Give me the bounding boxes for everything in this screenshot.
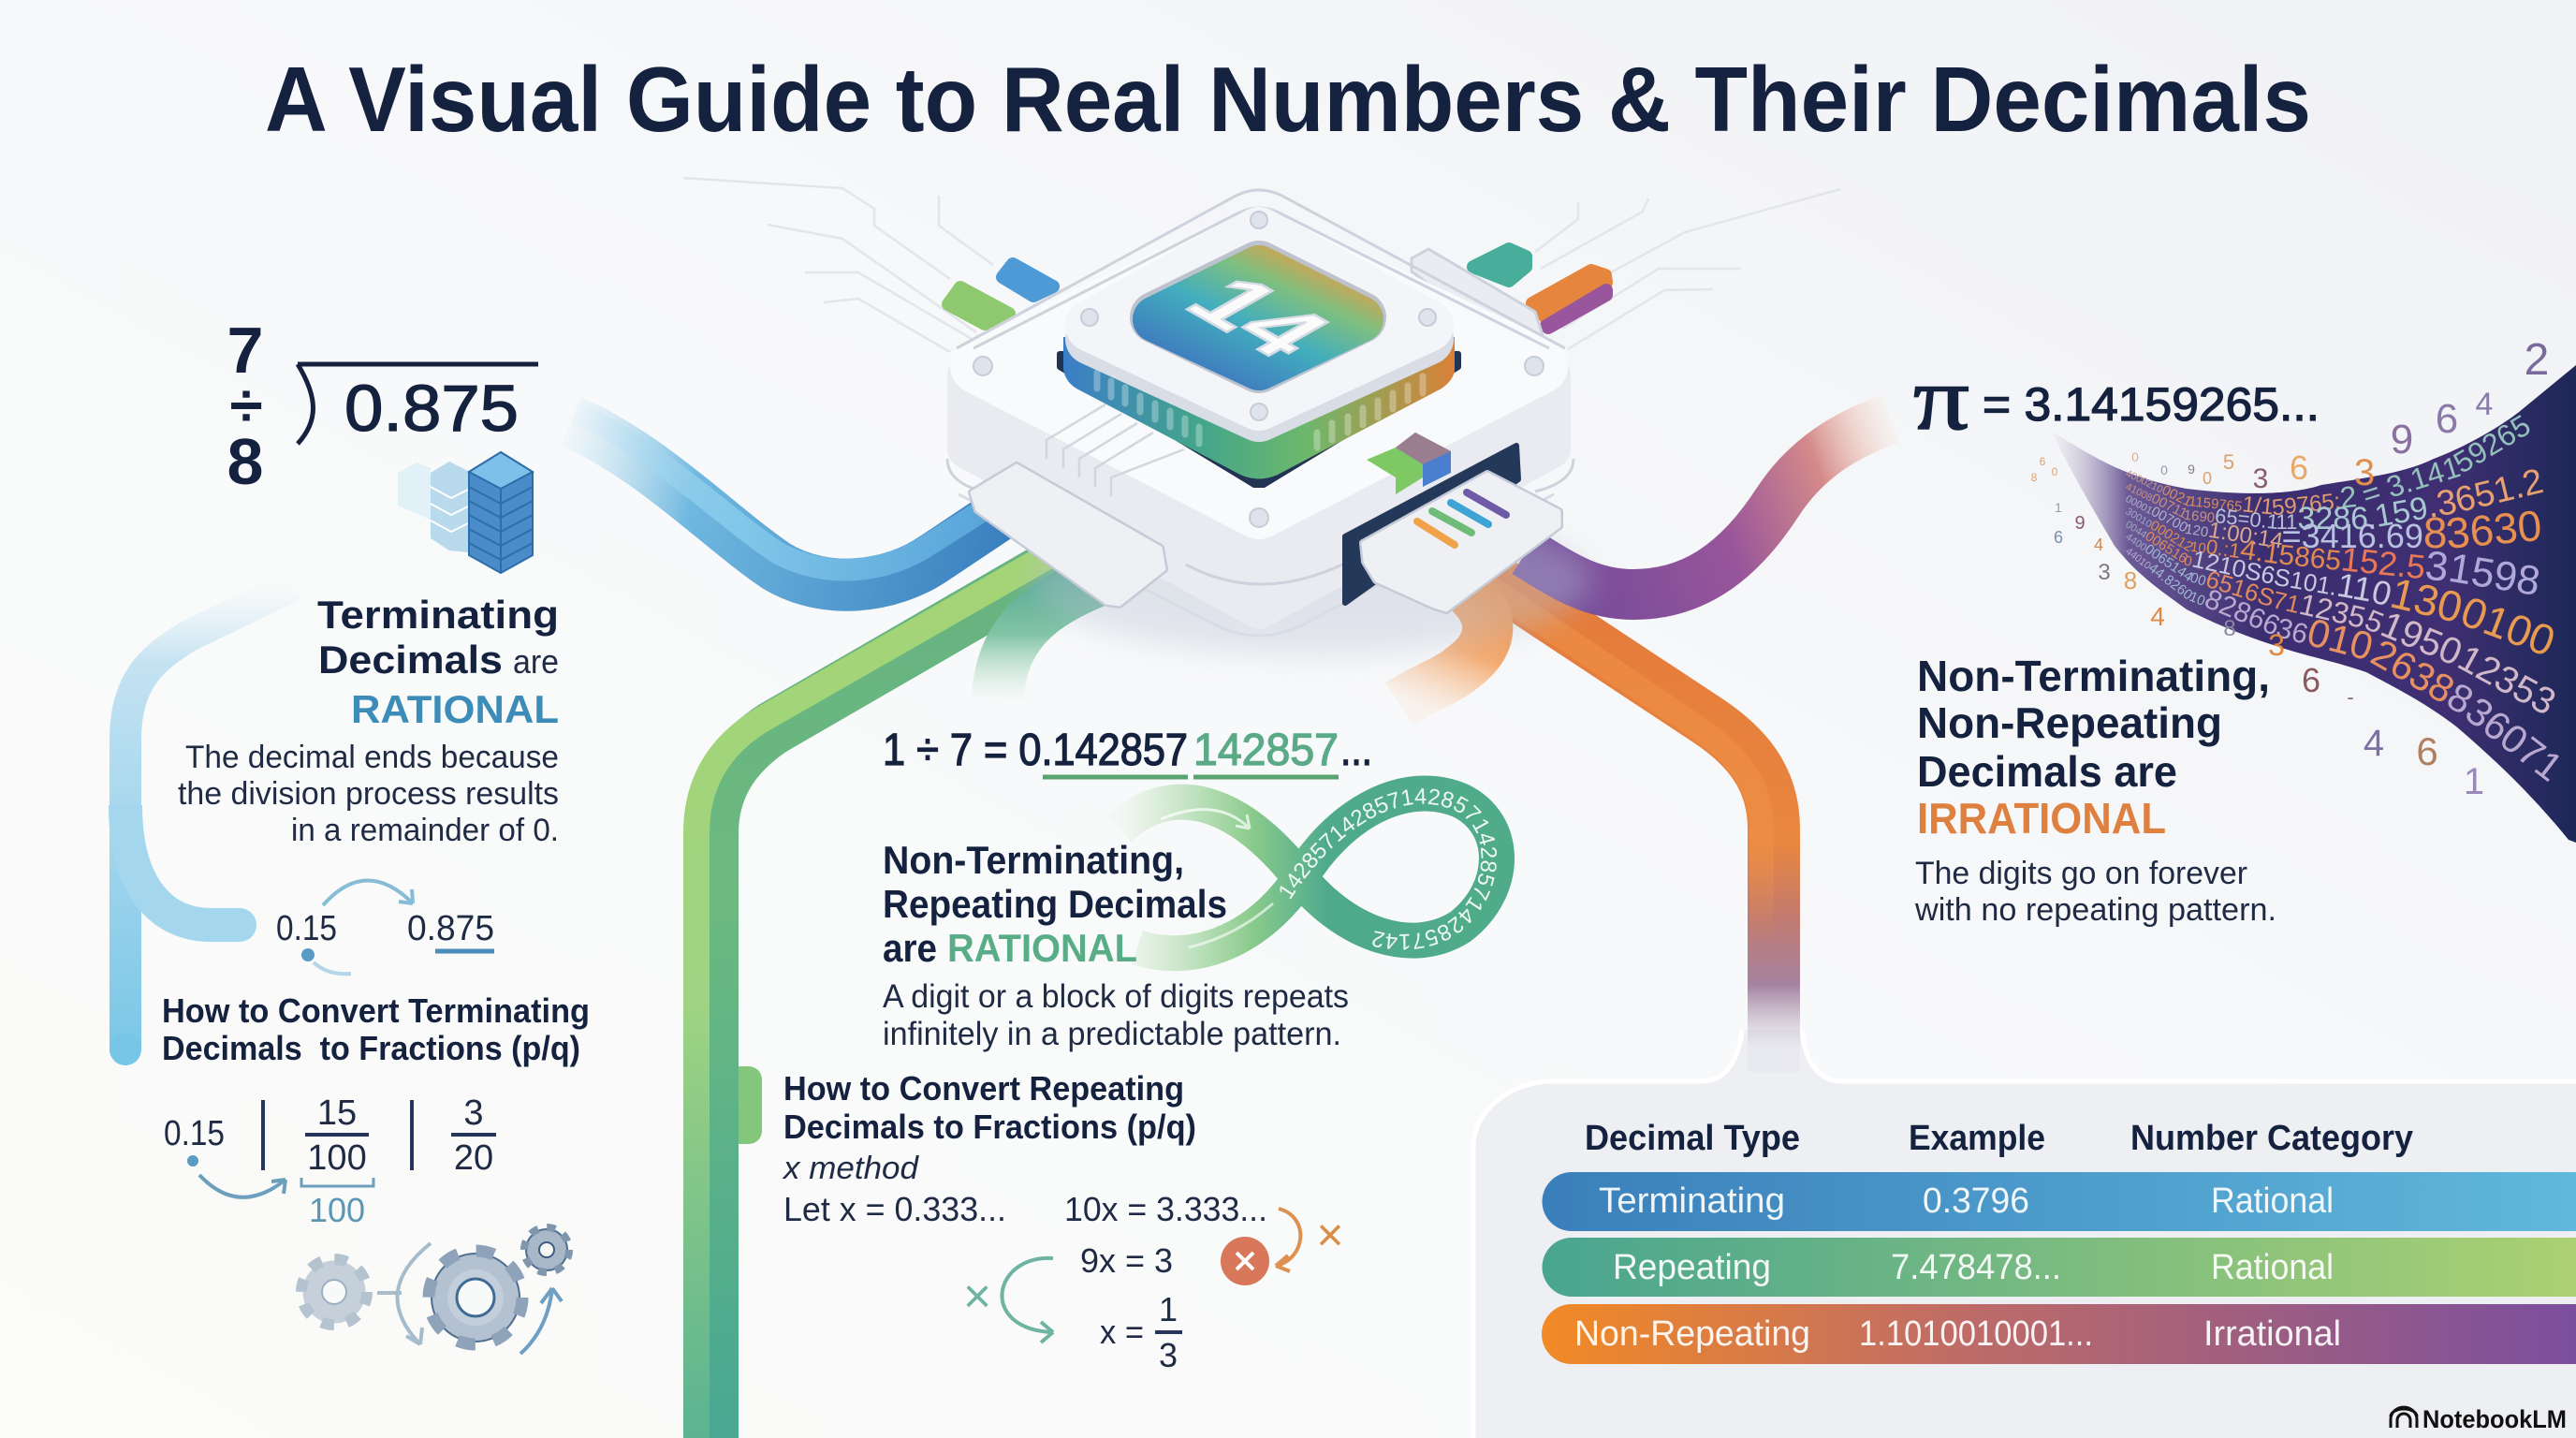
long division <box>227 314 538 498</box>
rear stubs <box>948 249 1606 328</box>
scattered digits: 4 <box>2150 602 2165 631</box>
scattered digits: 9 <box>2074 513 2086 534</box>
scattered digits: 5 <box>2223 450 2234 474</box>
conversion steps: repeating: × <box>963 1269 991 1324</box>
terminating examples: 0.875 <box>407 909 494 948</box>
scattered digits: 4 <box>2476 387 2493 422</box>
heading: convert repeating: How to Convert Repeating <box>783 1069 1184 1108</box>
heading: repeating: Non-Terminating, <box>883 838 1184 882</box>
title: A Visual Guide to Real Numbers & Their Decimals <box>265 48 2311 151</box>
heading: irrational: Non-Repeating <box>1917 698 2222 747</box>
conversion steps: repeating: 1 <box>1159 1290 1178 1328</box>
right connector <box>1363 474 1559 610</box>
long division: 7 <box>227 314 263 387</box>
cable: purple <box>1526 418 1891 594</box>
scattered digits: - <box>2347 685 2354 709</box>
heading: terminating <box>317 593 559 731</box>
scattered digits: 1 <box>2055 500 2062 515</box>
equation: 1 divided by 7: 1 ÷ 7 = 0.142857 <box>883 726 1188 775</box>
chip band <box>1063 337 1455 479</box>
scattered digits: 9 <box>2391 417 2413 462</box>
icon: infinity loop <box>1124 775 1515 972</box>
table row: repeating <box>1543 1238 2576 1297</box>
table header <box>1585 1119 2413 1158</box>
screen bezel <box>1156 267 1360 367</box>
icon: infinity loop: 142857142857142857142857142857142 <box>1281 788 1497 949</box>
left connector <box>972 465 1164 605</box>
scattered digits: 3 <box>2354 452 2375 493</box>
table row: repeating: Rational <box>2211 1248 2334 1287</box>
text: irrational description: with no repeating pattern. <box>1914 892 2276 928</box>
heading: irrational: Non-Terminating, <box>1917 652 2270 700</box>
long division: 0.875 <box>344 372 519 445</box>
heading: repeating: Repeating Decimals <box>883 882 1227 926</box>
scattered digits: 8 <box>2223 616 2236 641</box>
heading: convert terminating: Decimals to Fractions (p/q) <box>162 1029 580 1067</box>
equation: pi <box>1913 348 2320 448</box>
chip plate <box>1091 247 1427 416</box>
text: repeating description <box>883 978 1349 1052</box>
scattered digits: 3 <box>2253 463 2268 494</box>
cable: orange main <box>1451 557 1774 1072</box>
cable: orange secondary <box>1399 576 1487 704</box>
hub outlines <box>947 190 1573 636</box>
conversion steps: repeating: × <box>1316 1209 1344 1261</box>
conversion steps: repeating <box>782 1151 1344 1374</box>
cable: blue <box>571 410 1020 585</box>
decimal ribbon <box>2031 335 2576 843</box>
conversion steps: terminating: 15 <box>317 1093 357 1133</box>
heading: repeating <box>883 838 1227 970</box>
text: terminating description: the division process results <box>178 776 559 812</box>
central hub <box>947 190 1606 655</box>
heading: convert terminating: How to Convert Terminating <box>162 991 590 1030</box>
chip vents <box>1097 373 1423 448</box>
scattered digits: 3 <box>2268 628 2285 662</box>
equation: 1 divided by 7: ... <box>1340 726 1372 775</box>
arrow: teal <box>1002 1258 1053 1343</box>
conversion steps: terminating: 100 <box>309 1191 365 1229</box>
cable: green secondary <box>998 576 1109 697</box>
scattered digits: 8 <box>2031 471 2038 484</box>
ribbon digit rows: 4100800711169065=0.1113286.159.3651.2 <box>2126 470 2543 530</box>
heading: repeating: RATIONAL <box>947 926 1137 970</box>
scattered digits: 6 <box>2040 455 2046 468</box>
table row: non-repeating <box>1542 1304 2576 1364</box>
ribbon digit rows: 30010000212100.:14.15865152.531598 <box>2126 507 2539 594</box>
equation: 1 divided by 7: 142857 <box>1193 726 1339 775</box>
table header: Example <box>1909 1119 2045 1158</box>
screws <box>973 212 1544 527</box>
scattered digits: 8 <box>2124 566 2137 594</box>
equation: pi: π <box>1913 348 1969 448</box>
heading: terminating: are <box>513 642 559 681</box>
long division: ÷ <box>229 372 263 439</box>
scattered digits: 4 <box>2364 723 2384 764</box>
cable: green main <box>696 548 1076 1438</box>
vertical blue connector <box>125 585 294 1049</box>
scattered digits: 2 <box>2525 335 2549 385</box>
icon: red cross <box>1221 1237 1269 1285</box>
table row: repeating: 7.478478... <box>1891 1248 2061 1287</box>
rear right connector <box>1412 249 1543 335</box>
conversion steps: repeating: 9x = 3 <box>1080 1241 1173 1280</box>
heading: irrational <box>1917 652 2270 843</box>
text: repeating description: A digit or a block of digits repeats <box>883 978 1349 1015</box>
ribbon digit rows: 00001007001201:00:14=3416.6983630 <box>2126 495 2540 549</box>
arrow: orange <box>1276 1209 1300 1271</box>
tab on green cable <box>721 1066 762 1144</box>
heading: terminating: RATIONAL <box>351 687 559 731</box>
icon: gears <box>301 1227 569 1354</box>
hub top face <box>978 234 1540 511</box>
table row: terminating: Rational <box>2211 1181 2334 1221</box>
table row: non-repeating: Non-Repeating <box>1574 1314 1810 1354</box>
table row: terminating: 0.3796 <box>1923 1181 2029 1221</box>
text: terminating description: The decimal ends because <box>185 740 559 775</box>
icon: stacked blocks <box>398 452 533 573</box>
heading: terminating: Decimals <box>318 638 503 682</box>
scattered digits: 0 <box>2131 449 2139 464</box>
conversion steps: terminating: 0.15 <box>164 1114 225 1153</box>
colour tag <box>1367 433 1451 494</box>
table row: terminating <box>1543 1172 2576 1231</box>
right connector well <box>1345 446 1518 603</box>
dark well <box>1060 354 1458 485</box>
conversion steps: repeating: Let x = 0.333... <box>783 1190 1006 1228</box>
scattered digits: 6 <box>2054 528 2063 547</box>
table header: Number Category <box>2130 1119 2413 1158</box>
scattered digits: 6 <box>2290 448 2308 487</box>
table row: non-repeating: Irrational <box>2203 1314 2341 1354</box>
scattered digits <box>2031 335 2549 802</box>
scattered digits: 1 <box>2464 761 2484 802</box>
text: irrational description: The digits go on forever <box>1915 856 2247 891</box>
table header: Decimal Type <box>1585 1119 1800 1158</box>
scattered digits: 9 <box>2188 462 2195 477</box>
scattered digits: 0 <box>2160 462 2168 477</box>
heading: repeating: are <box>883 926 937 970</box>
scattered digits: 0 <box>2203 469 2212 488</box>
hub shadow <box>1030 506 1591 655</box>
scattered digits: 4 <box>2094 536 2103 554</box>
table panel <box>1473 1030 2576 1438</box>
heading: irrational: Decimals are <box>1917 747 2177 796</box>
scattered digits: 6 <box>2436 396 2458 442</box>
ribbon digit rows: 4401044.82601082866360102638836071 <box>2126 549 2559 783</box>
text: terminating description: in a remainder of 0. <box>291 813 559 848</box>
ribbon digit rows: 4000210002111597651/159765:2 = 3.14159265 <box>2126 415 2529 515</box>
conversion steps: terminating: 3 <box>463 1093 484 1133</box>
chip number 14: 14 <box>1163 263 1354 371</box>
equation: 1 divided by 7 <box>883 726 1372 777</box>
conversion steps: repeating: x method <box>782 1151 919 1186</box>
ribs <box>1046 404 1184 496</box>
conversion steps: terminating: 100 <box>307 1138 367 1178</box>
conversion steps: repeating: x = <box>1100 1313 1144 1351</box>
heading: irrational: IRRATIONAL <box>1917 794 2166 843</box>
terminating examples: 0.15 <box>276 909 337 948</box>
conversion steps: terminating <box>164 1093 496 1229</box>
chip screen <box>1156 269 1360 367</box>
heading: convert terminating <box>162 991 590 1067</box>
conversion steps: repeating: 3 <box>1159 1336 1178 1374</box>
table row: terminating: Terminating <box>1599 1181 1785 1221</box>
long division: 8 <box>227 425 263 498</box>
connector colour lines <box>1417 492 1506 545</box>
heading: convert repeating <box>783 1069 1196 1146</box>
hub body side <box>966 374 1552 610</box>
conversion steps: terminating: 20 <box>454 1138 493 1178</box>
heading: convert repeating: Decimals to Fractions (p/q) <box>783 1108 1196 1146</box>
text: irrational description <box>1914 856 2276 928</box>
terminating examples <box>276 880 494 974</box>
scattered digits: 3 <box>2098 560 2111 585</box>
ribbon digit rows <box>2126 415 2559 783</box>
circuit traces <box>683 178 1840 352</box>
scattered digits: 6 <box>2416 729 2438 773</box>
text: repeating description: infinitely in a predictable pattern. <box>883 1016 1341 1052</box>
scattered digits: 6 <box>2302 661 2320 699</box>
conversion steps: repeating: 10x = 3.333... <box>1064 1190 1267 1228</box>
scattered digits: 0 <box>2052 465 2058 478</box>
ribbon digit rows: 44000065144006516S7112355195012353 <box>2126 534 2555 713</box>
table row: non-repeating: 1.1010010001... <box>1859 1314 2093 1354</box>
heading: terminating: Terminating <box>317 593 559 637</box>
ribbon digit rows: 004400651601210S6S101.1101300100 <box>2126 521 2554 653</box>
text: terminating description <box>178 740 559 848</box>
table row: repeating: Repeating <box>1613 1248 1771 1287</box>
NotebookLM mark: NotebookLM <box>2422 1405 2567 1433</box>
equation: pi: = 3.14159265... <box>1983 378 2320 431</box>
